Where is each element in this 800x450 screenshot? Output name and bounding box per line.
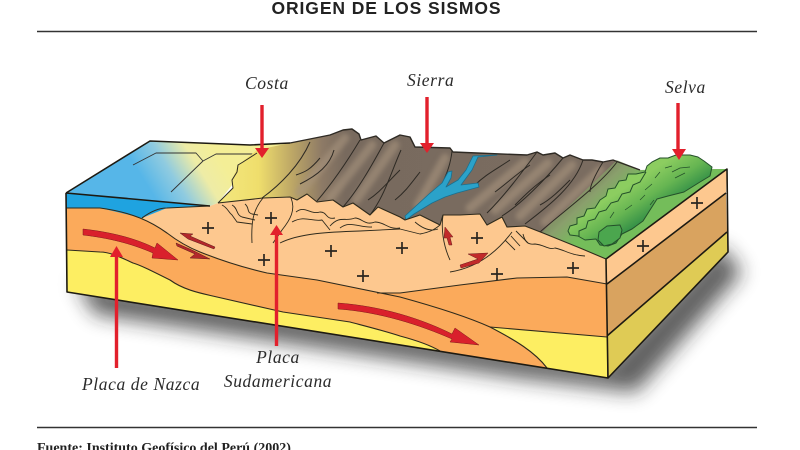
mountain crest outline — [290, 129, 640, 170]
leader arrow: Sierra — [420, 97, 434, 153]
right face: tan layer — [607, 193, 727, 336]
strata outlines — [66, 194, 607, 368]
front face: orange upper layer — [377, 277, 607, 337]
leader arrow: Selva — [672, 103, 686, 160]
subduction arrow: lower plate — [338, 303, 479, 345]
fault motion half arrows left — [176, 233, 215, 259]
right face: mustard layer — [607, 232, 728, 378]
green lowland — [540, 160, 727, 259]
top surface: coast and mountain terrain — [218, 129, 727, 259]
jungle — [568, 155, 712, 246]
label: Selva: Selva — [665, 77, 706, 97]
label: Sierra: Sierra — [407, 70, 454, 90]
drop shadow of block — [75, 245, 742, 392]
front face: peach continental crust — [142, 194, 607, 293]
fault motion arrows right — [444, 227, 488, 268]
front face: sea water — [66, 193, 210, 218]
leader arrow: Placa Sudamericana — [270, 225, 283, 346]
subduction arrow: Nazca plate — [83, 229, 178, 260]
coast line — [218, 153, 257, 203]
label: Placa Sudamericana: Placa — [255, 347, 300, 367]
top surface: sea — [66, 141, 290, 206]
outer block outline — [66, 141, 728, 378]
label: Costa: Costa — [245, 73, 289, 93]
right face: peach layer — [607, 169, 727, 284]
ridge highlights — [300, 138, 600, 222]
plus signs: continental crust — [202, 197, 703, 282]
front face: orange layer — [66, 208, 547, 368]
leader arrow: Costa — [255, 105, 269, 158]
river — [405, 155, 497, 220]
front face: yellow lower layer — [67, 193, 607, 378]
label: Placa Sudamericana: Sudamericana — [224, 371, 332, 391]
mountain ridge lines — [262, 140, 617, 232]
leader arrow: Placa de Nazca — [110, 246, 123, 368]
labels — [81, 70, 706, 394]
geological block diagram — [66, 97, 728, 378]
folded strata and faults — [222, 198, 585, 272]
label: Placa de Nazca: Placa de Nazca — [81, 374, 200, 394]
sea floor contour lines — [133, 153, 257, 192]
